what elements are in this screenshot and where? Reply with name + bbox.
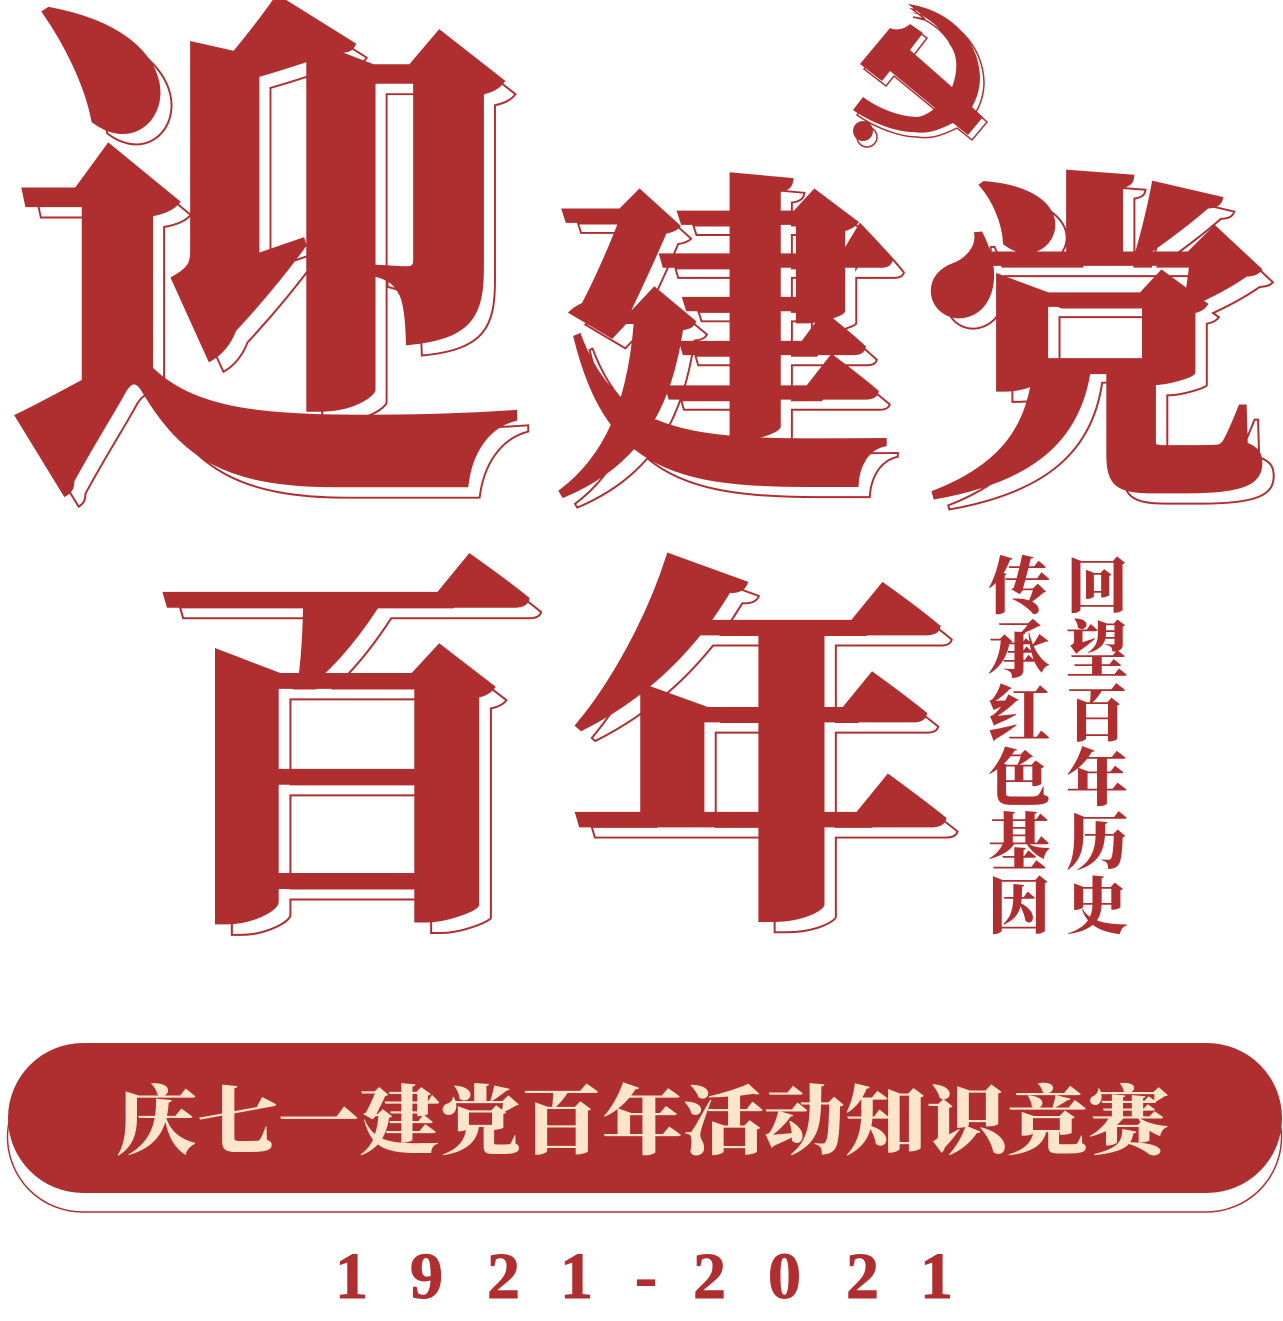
subtitle column: 传承红色基因: 承 bbox=[988, 618, 1050, 686]
subtitle column: 回望百年历史: 史 bbox=[1066, 874, 1128, 942]
subtitle column: 回望百年历史: 年 bbox=[1066, 745, 1128, 814]
subtitle column: 传承红色基因: 基 bbox=[988, 810, 1050, 878]
title character: 建: 建 bbox=[569, 176, 907, 549]
title character: 年: 年 bbox=[582, 559, 967, 979]
subtitle column: 回望百年历史: 望 bbox=[1066, 618, 1128, 686]
title character: 党: 党 bbox=[922, 161, 1269, 539]
subtitle column: 回望百年历史: 百 bbox=[1066, 682, 1128, 750]
subtitle column: 传承红色基因 bbox=[988, 554, 1050, 942]
title character: 年: 年 bbox=[568, 547, 953, 966]
title character: 党: 党 bbox=[936, 174, 1282, 552]
subtitle column: 传承红色基因: 色 bbox=[988, 745, 1050, 814]
subtitle column: 传承红色基因: 因 bbox=[988, 874, 1050, 942]
title character: 百: 百 bbox=[161, 555, 560, 986]
subtitle column: 传承红色基因: 传 bbox=[988, 554, 1050, 622]
title character: 迎: 迎 bbox=[26, 0, 537, 573]
banner text: 庆七一建党百年活动知识竞赛 bbox=[116, 1080, 1177, 1164]
title character: 建: 建 bbox=[555, 163, 893, 537]
subtitle column: 回望百年历史: 历 bbox=[1066, 810, 1128, 878]
subtitle column: 传承红色基因: 红 bbox=[988, 682, 1050, 750]
title character: 百: 百 bbox=[147, 542, 546, 973]
subtitle column: 回望百年历史 bbox=[1066, 554, 1128, 942]
date range: 1921-2021 bbox=[335, 1240, 953, 1313]
subtitle column: 回望百年历史: 回 bbox=[1066, 554, 1128, 622]
banner pill bbox=[8, 1043, 1282, 1212]
icon: hammer and sickle bbox=[853, 4, 987, 147]
